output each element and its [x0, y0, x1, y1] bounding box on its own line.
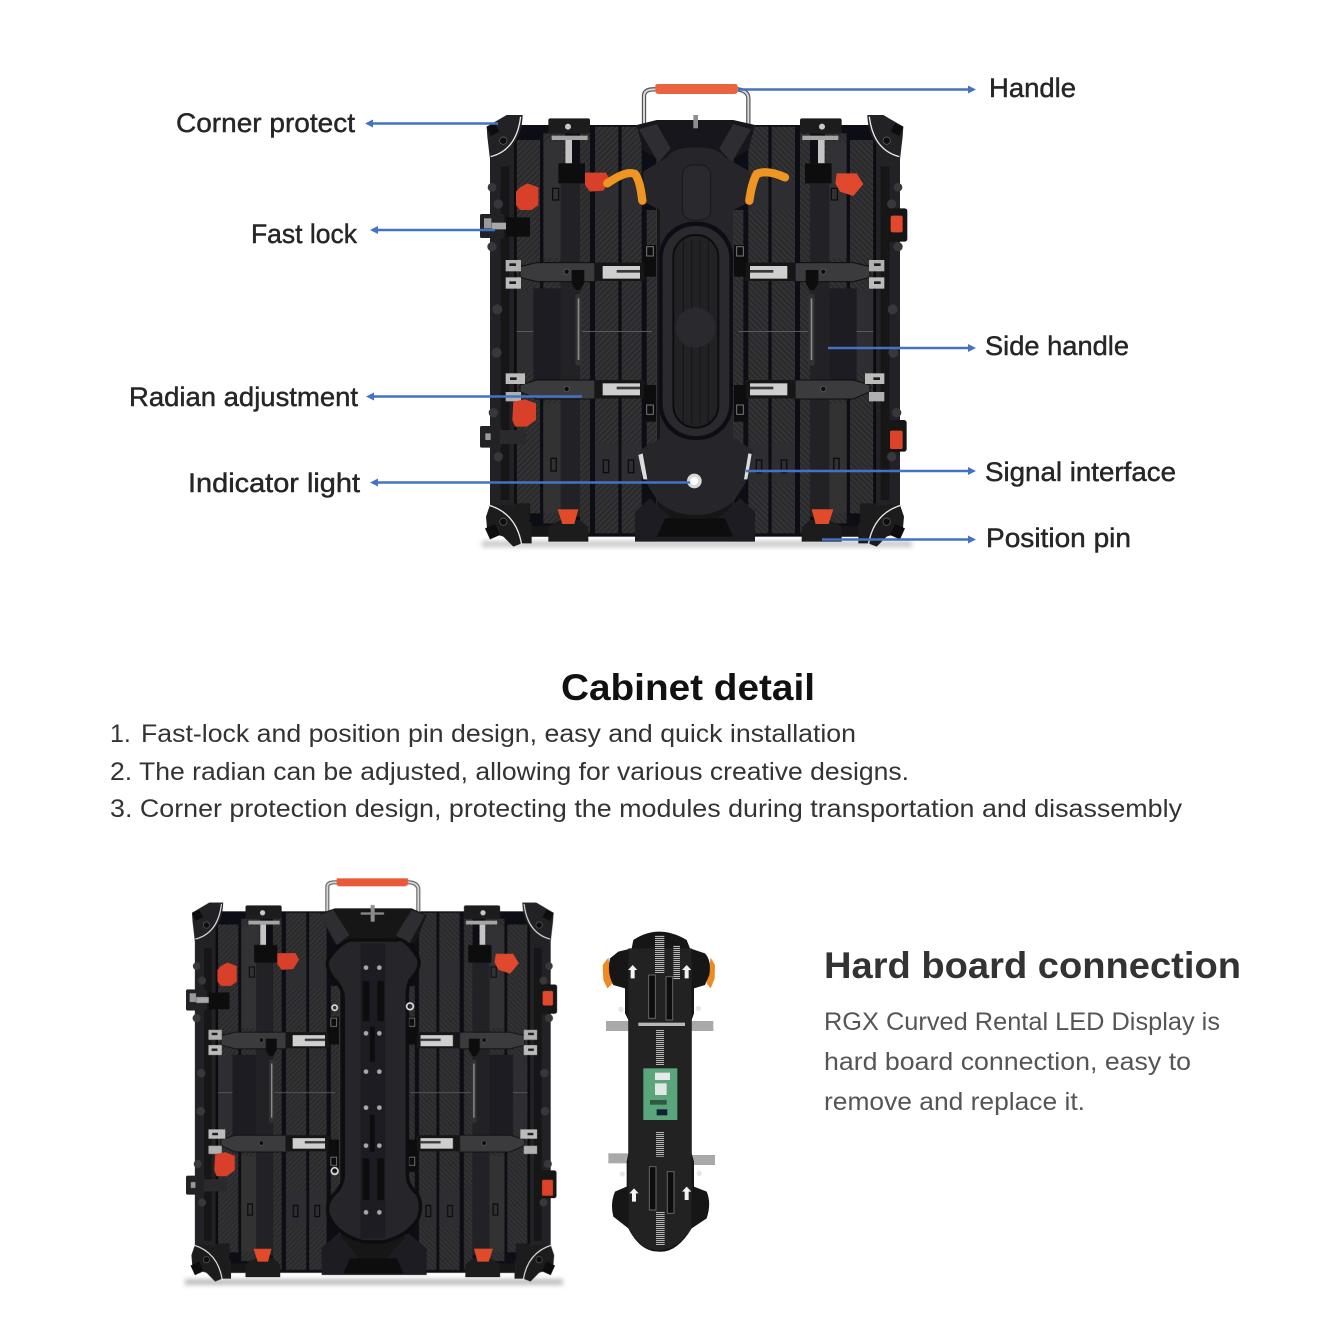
text block: hard board description: hard board connection, easy to — [824, 1048, 1191, 1076]
callout: fast lock — [251, 219, 495, 249]
text block: feature list: Fast-lock and position pin design, easy and quick installation — [141, 720, 856, 748]
callout: corner protect — [176, 108, 498, 138]
heading: hard board connection: Hard board connection — [824, 945, 1241, 986]
icon: silver clips — [606, 1021, 715, 1165]
callout: radian adjustment — [129, 382, 582, 412]
text block: feature list: 2. The radian can be adjusted, allowing for various creative designs. — [110, 758, 909, 786]
control board module — [603, 932, 715, 1252]
icon: green receiving card — [643, 1068, 677, 1120]
callout: handle: Handle — [989, 73, 1076, 103]
callout: indicator light — [188, 468, 690, 498]
text block: feature list — [110, 720, 1183, 823]
center connection plate — [320, 905, 427, 1275]
callout: corner protect: Corner protect — [176, 108, 356, 138]
text block: hard board description — [824, 1008, 1220, 1116]
callout: radian adjustment: Radian adjustment — [129, 382, 359, 412]
callout: signal interface: Signal interface — [985, 457, 1176, 487]
callout: indicator light: Indicator light — [188, 468, 361, 498]
callout: fast lock: Fast lock — [251, 219, 357, 249]
text block: hard board description: RGX Curved Rental LED Display is — [824, 1008, 1220, 1036]
top cabinet rear view — [480, 84, 912, 547]
heading: cabinet detail: Cabinet detail — [561, 667, 815, 708]
callout: handle — [738, 73, 1076, 103]
text block: feature list: 1. — [110, 720, 131, 748]
callout: side handle — [828, 331, 1129, 361]
text block: feature list: 3. Corner protection design, protecting the modules during transportation and disassembly — [110, 795, 1183, 823]
callout: signal interface — [746, 457, 1176, 487]
icon: carry handle — [327, 878, 418, 913]
icon: orange side grips — [603, 958, 715, 988]
icon: carry handle — [644, 84, 748, 125]
icon: orange straps — [607, 172, 785, 201]
icon: indicator light — [687, 474, 702, 488]
bottom cabinet with cover removed — [110, 73, 1241, 1285]
text block: hard board description: remove and replace it. — [824, 1088, 1085, 1116]
icon: signal interface clips — [638, 453, 752, 479]
center shell cover — [635, 115, 755, 542]
callout: position pin — [822, 523, 1131, 553]
callout: position pin: Position pin — [986, 523, 1131, 553]
callout: side handle: Side handle — [985, 331, 1129, 361]
